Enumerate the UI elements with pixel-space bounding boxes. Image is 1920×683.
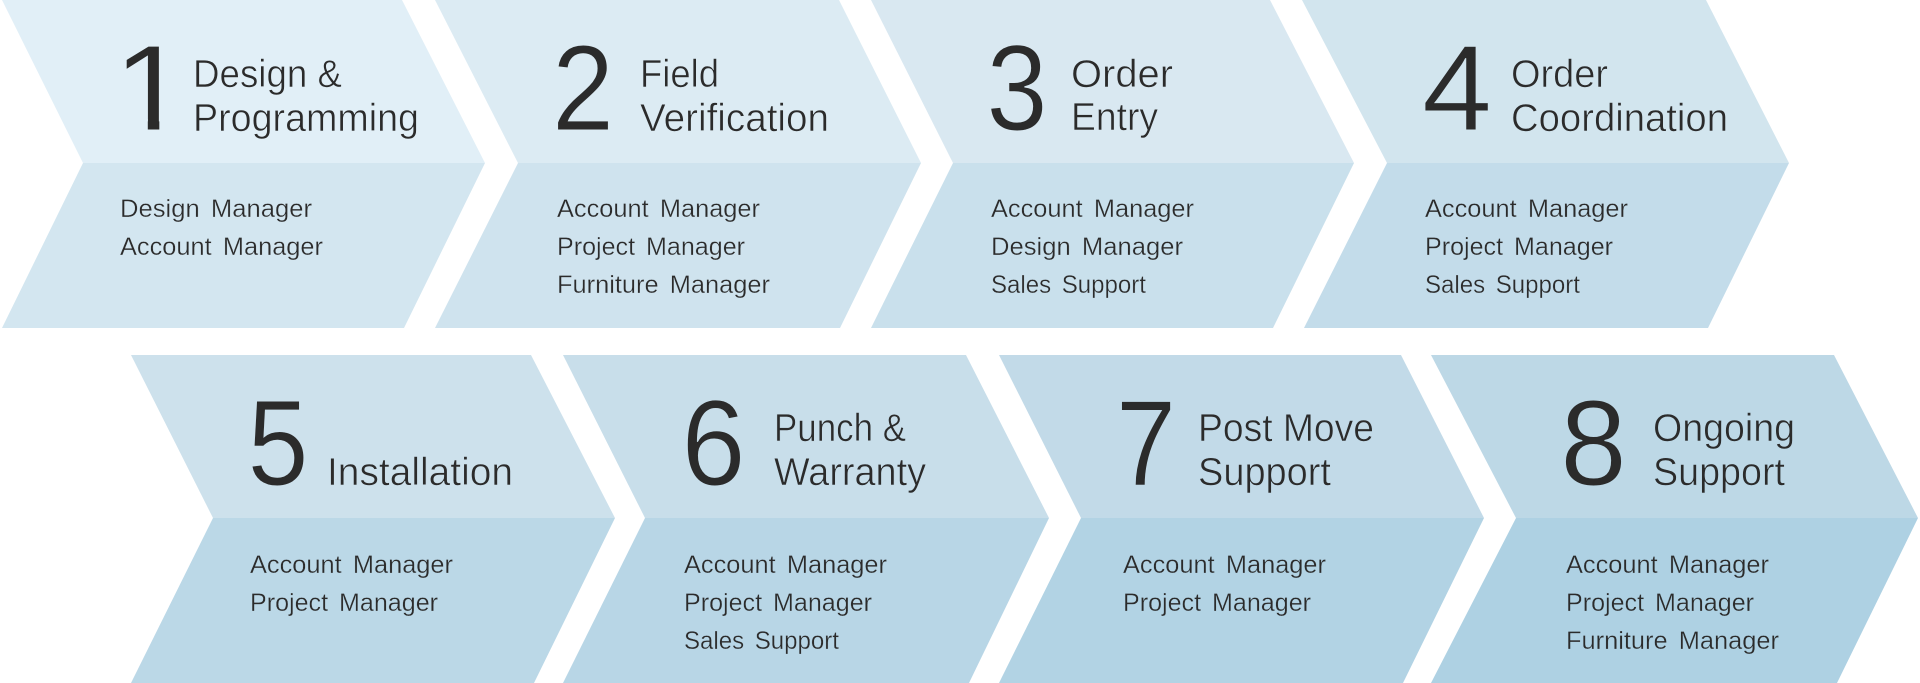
step 3: Order Entry [871, 0, 1354, 328]
step 1: Design & Programming: 1 [113, 20, 189, 156]
step 5: Installation: Installation [327, 451, 513, 494]
step 4: Order Coordination: Project Manager [1425, 233, 1613, 261]
step 7: Post Move Support: Support [1198, 451, 1331, 494]
step 7: Post Move Support [999, 355, 1484, 683]
step 7: Post Move Support: 7 [1116, 375, 1176, 511]
step 2: Field Verification: Project Manager [557, 233, 745, 261]
step 2: Field Verification: 2 [552, 20, 614, 156]
step 3: Order Entry: 3 [986, 20, 1048, 156]
step 2: Field Verification: Verification [640, 97, 829, 140]
step 3: Order Entry: Sales Support [991, 271, 1146, 299]
step 3: Order Entry: Order [1071, 53, 1173, 96]
step 8: Ongoing Support [1431, 355, 1918, 683]
step 2: Field Verification: Furniture Manager [557, 271, 770, 299]
step 8: Ongoing Support: Project Manager [1566, 589, 1754, 617]
step 1: Design & Programming: Programming [193, 97, 419, 140]
step 8: Ongoing Support: Support [1653, 451, 1785, 494]
step 3: Order Entry: Entry [1071, 96, 1158, 139]
step 8: Ongoing Support: Furniture Manager [1566, 627, 1779, 655]
step 1: Design & Programming: Design & [193, 53, 342, 96]
step 8: Ongoing Support: Account Manager [1566, 551, 1769, 579]
step 4: Order Coordination: Order [1511, 53, 1608, 96]
step 6: Punch & Warranty: Account Manager [684, 551, 887, 579]
step 6: Punch & Warranty: Punch & [774, 407, 906, 450]
step 2: Field Verification: Account Manager [557, 195, 760, 223]
step 5: Installation: Account Manager [250, 551, 453, 579]
step 8: Ongoing Support: 8 [1560, 375, 1627, 511]
step 1: Design & Programming: Account Manager [120, 233, 323, 261]
step 8: Ongoing Support: Ongoing [1653, 407, 1795, 450]
step 1: Design & Programming: Design Manager [120, 195, 312, 223]
step 6: Punch & Warranty: Project Manager [684, 589, 872, 617]
step 4: Order Coordination: Account Manager [1425, 195, 1628, 223]
step 3: Order Entry: Design Manager [991, 233, 1183, 261]
step 5: Installation [131, 355, 615, 683]
step 6: Punch & Warranty: Sales Support [684, 627, 839, 655]
step 6: Punch & Warranty [563, 355, 1049, 683]
step 4: Order Coordination: Sales Support [1425, 271, 1580, 299]
step 4: Order Coordination [1302, 0, 1789, 328]
step 5: Installation: Project Manager [250, 589, 438, 617]
step 5: Installation: 5 [248, 375, 308, 511]
step 4: Order Coordination: 4 [1422, 20, 1492, 156]
step 1: Design & Programming [2, 0, 485, 328]
step 2: Field Verification [435, 0, 921, 328]
step 6: Punch & Warranty: 6 [682, 375, 746, 511]
step 7: Post Move Support: Project Manager [1123, 589, 1311, 617]
step 3: Order Entry: Account Manager [991, 195, 1194, 223]
step 6: Punch & Warranty: Warranty [774, 451, 926, 494]
step 2: Field Verification: Field [640, 53, 719, 96]
step 7: Post Move Support: Post Move [1198, 407, 1374, 450]
step 7: Post Move Support: Account Manager [1123, 551, 1326, 579]
step 4: Order Coordination: Coordination [1511, 97, 1728, 140]
